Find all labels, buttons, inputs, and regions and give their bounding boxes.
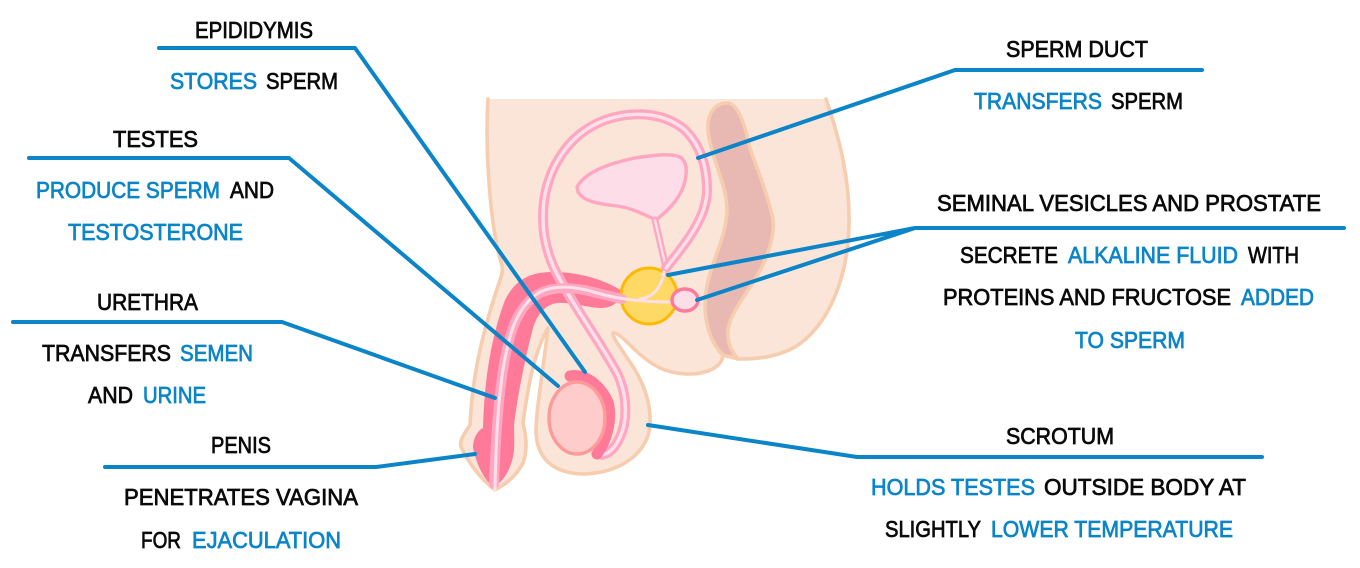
label: urethra: URETHRA [97, 289, 199, 315]
label: epididymis: SPERM [266, 68, 338, 94]
label: seminal vesicles and prostate: ADDED [1241, 284, 1314, 310]
label: epididymis: STORES [170, 68, 257, 94]
epididymis [570, 376, 610, 454]
label: seminal vesicles and prostate: WITH [1248, 242, 1299, 268]
penis erectile tissue [473, 272, 622, 484]
prostate gland [621, 268, 677, 324]
label: scrotum: SCROTUM [1006, 423, 1114, 449]
bladder [577, 155, 686, 220]
leader line: sperm duct [698, 70, 1202, 158]
leader lines: seminal vesicles and prostate [668, 228, 1344, 300]
label: seminal vesicles and prostate: PROTEINS AND FRUCTOSE [943, 284, 1231, 310]
leader line: scrotum [648, 425, 1262, 457]
label: seminal vesicles and prostate: SECRETE [960, 242, 1058, 268]
label: scrotum: OUTSIDE BODY AT [1044, 474, 1246, 500]
rectum [705, 103, 773, 359]
label: scrotum: SLIGHTLY [885, 516, 981, 542]
label: sperm duct: SPERM [1111, 88, 1183, 114]
label: penis: FOR [141, 527, 181, 553]
urethra [494, 272, 675, 490]
anatomy diagram [461, 99, 849, 490]
leader line: testes [29, 158, 558, 386]
label: sperm duct: SPERM DUCT [1006, 36, 1148, 62]
label: testes [29, 126, 558, 386]
label: testes: TESTES [113, 126, 198, 152]
label: scrotum: LOWER TEMPERATURE [991, 516, 1233, 542]
body silhouette [461, 99, 849, 490]
seminal vesicle [672, 289, 698, 311]
label: penis: EJACULATION [192, 527, 341, 553]
label: testes: TESTOSTERONE [68, 219, 243, 245]
label: scrotum: HOLDS TESTES [871, 474, 1035, 500]
label: sperm duct: TRANSFERS [974, 88, 1102, 114]
label: seminal vesicles and prostate [668, 190, 1344, 353]
label: epididymis [159, 17, 585, 372]
label: scrotum [648, 423, 1262, 542]
testis [549, 382, 605, 454]
leader line: penis [105, 454, 475, 467]
label: seminal vesicles and prostate: TO SPERM [1075, 327, 1185, 353]
sperm duct loop [543, 114, 707, 455]
label: testes: PRODUCE SPERM [36, 177, 220, 203]
label: urethra: TRANSFERS [42, 340, 171, 366]
leader line: urethra [13, 322, 495, 398]
label: urethra: AND [88, 382, 133, 408]
label: penis: PENIS [211, 432, 271, 458]
label: urethra [13, 289, 495, 408]
leader line: epididymis [159, 48, 585, 372]
label: urethra: URINE [143, 382, 206, 408]
label: seminal vesicles and prostate: SEMINAL VESICLES AND PROSTATE [937, 190, 1321, 216]
label: epididymis: EPIDIDYMIS [195, 17, 313, 43]
bladder neck tube [655, 220, 666, 268]
label: penis [105, 432, 475, 553]
label: testes: AND [230, 177, 274, 203]
label: seminal vesicles and prostate: ALKALINE FLUID [1068, 242, 1238, 268]
label: sperm duct [698, 36, 1202, 158]
label: urethra: SEMEN [180, 340, 253, 366]
label: penis: PENETRATES VAGINA [124, 484, 359, 510]
